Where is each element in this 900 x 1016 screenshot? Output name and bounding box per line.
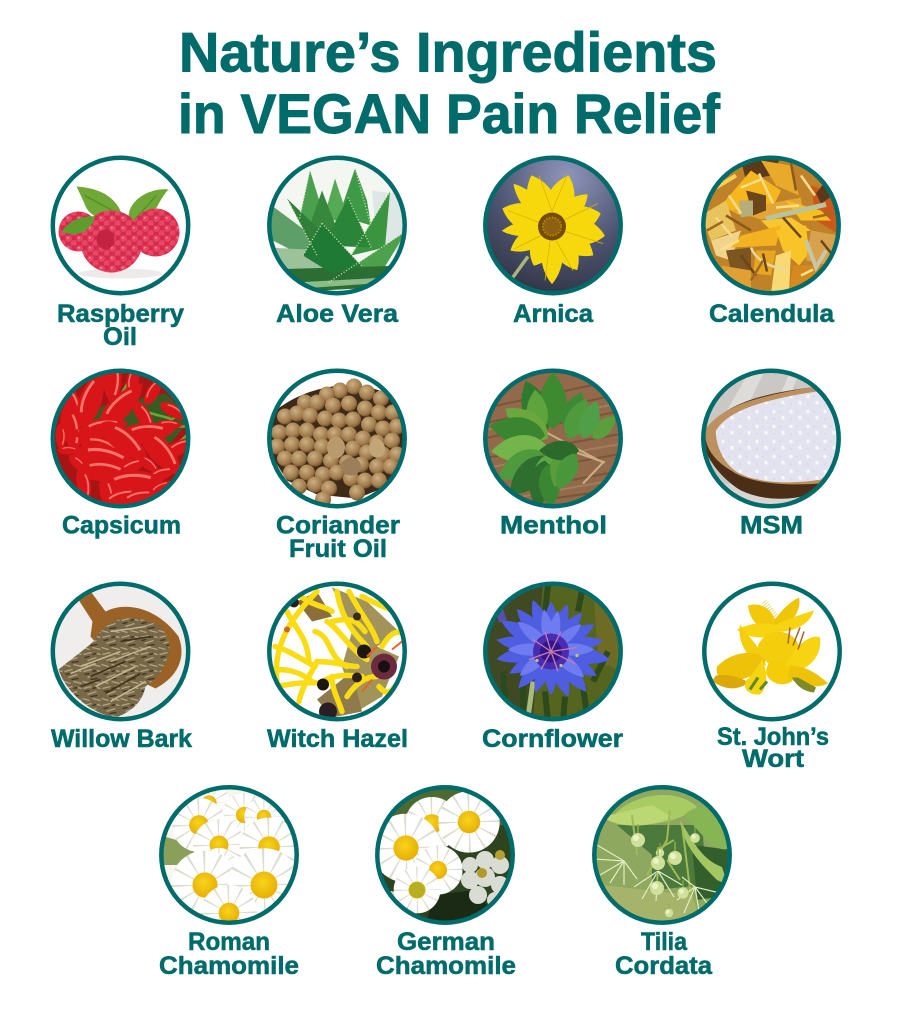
label: Capsicum	[62, 512, 181, 540]
ring	[594, 787, 730, 923]
label: Menthol	[500, 512, 607, 540]
panel: cornflower	[482, 582, 623, 753]
title	[178, 20, 720, 145]
ring	[704, 584, 840, 719]
panel: capsicum	[50, 368, 190, 539]
label: St. John’s	[717, 723, 829, 751]
label	[615, 928, 713, 980]
label	[57, 300, 184, 351]
icon: witch hazel blossoms	[272, 588, 402, 717]
panel: arnica	[483, 156, 623, 328]
ring	[269, 584, 405, 719]
icon: willow bark on spoon	[55, 586, 186, 717]
label: Oil	[103, 323, 137, 351]
title: Nature’s Ingredients	[179, 20, 717, 84]
ring	[485, 158, 621, 293]
label: Fruit Oil	[289, 535, 387, 563]
panel: calendula	[701, 156, 841, 328]
panel: raspberry oil	[50, 156, 190, 351]
label	[276, 512, 400, 563]
label: Tilia	[641, 928, 688, 956]
icon: raspberries	[58, 186, 180, 278]
label: Chamomile	[376, 952, 516, 980]
panel: willow bark	[50, 582, 192, 753]
panel: aloe vera	[267, 156, 407, 328]
label: Witch Hazel	[267, 725, 408, 753]
ring	[53, 371, 188, 506]
title: in VEGAN Pain Relief	[178, 82, 720, 145]
icon: red chili peppers	[55, 373, 186, 504]
ring	[703, 158, 839, 293]
label: MSM	[740, 512, 803, 540]
icon: msm crystals in wooden bowl	[706, 373, 836, 504]
label	[717, 723, 829, 773]
ring	[703, 371, 839, 506]
icon: german chamomile flowers	[380, 790, 510, 920]
ring	[53, 584, 188, 719]
icon: aloe plant	[272, 160, 402, 291]
ring	[161, 787, 297, 923]
label: Arnica	[513, 300, 594, 328]
ring	[485, 584, 621, 719]
ring	[377, 787, 513, 923]
ring	[485, 371, 621, 506]
label: Aloe Vera	[276, 300, 399, 328]
label: German	[397, 928, 495, 956]
panel: coriander fruit oil	[267, 368, 407, 563]
icon: dried calendula petals	[706, 160, 836, 291]
ring	[269, 158, 405, 293]
panel: german chamomile	[375, 785, 516, 980]
label: Cornflower	[482, 725, 623, 753]
icon: coriander seeds	[272, 378, 402, 504]
label: Calendula	[709, 300, 835, 328]
label: Wort	[742, 745, 805, 773]
label: Willow Bark	[51, 725, 192, 753]
panel: menthol	[483, 368, 623, 540]
label: Coriander	[276, 512, 400, 540]
ring	[53, 158, 188, 293]
icon: arnica flower	[488, 160, 618, 291]
ring	[269, 371, 405, 506]
panel: roman chamomile	[159, 785, 301, 980]
label: Raspberry	[57, 300, 184, 328]
label: Roman	[188, 928, 270, 956]
icon: mint bunch	[488, 373, 618, 504]
panel: witch hazel	[267, 582, 408, 753]
icon: yellow st. john's wort flowers	[712, 598, 828, 695]
icon: linden tree blossoms	[596, 790, 728, 920]
panel: msm	[701, 368, 841, 540]
panel: st. john's wort	[702, 582, 842, 773]
panel: tilia cordata	[592, 785, 732, 980]
label	[376, 928, 516, 980]
label	[159, 928, 299, 980]
label: Cordata	[615, 952, 713, 980]
icon: blue cornflower	[488, 586, 618, 717]
icon: roman chamomile flowers	[164, 790, 294, 920]
label: Chamomile	[159, 952, 299, 980]
